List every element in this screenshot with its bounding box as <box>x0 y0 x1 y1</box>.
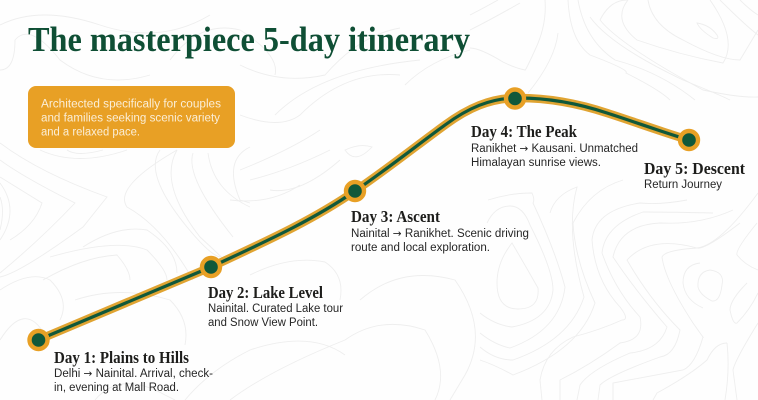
callout: and families seeking scenic variety <box>41 112 220 124</box>
callout: and a relaxed pace. <box>41 126 140 138</box>
text: day 5 <box>644 159 745 191</box>
text: day 1: Delhi → Nainital. Arrival, check- <box>54 368 213 380</box>
callout <box>28 86 235 148</box>
text: day 2: and Snow View Point. <box>208 317 318 329</box>
text: day 2 <box>208 283 343 329</box>
text: day 1 <box>54 348 213 394</box>
text: day 4: Ranikhet → Kausani. Unmatched <box>471 143 638 155</box>
route line <box>38 98 689 340</box>
text: day 4: Day 4: The Peak <box>471 122 578 141</box>
text: day 5: Return Journey <box>644 179 722 191</box>
marker: day 1 <box>30 331 48 349</box>
text: day 2: Day 2: Lake Level <box>208 283 323 302</box>
text: day 3 <box>351 207 529 254</box>
text: day 4: Himalayan sunrise views. <box>471 157 601 169</box>
marker: day 2 <box>202 258 220 276</box>
marker: day 5 <box>680 131 698 149</box>
text: day 3: Nainital → Ranikhet. Scenic driving <box>351 228 529 240</box>
text: day 3: Day 3: Ascent <box>351 207 440 226</box>
text: day 1: in, evening at Mall Road. <box>54 382 179 394</box>
marker: day 3 <box>346 182 364 200</box>
text: day 2: Nainital. Curated Lake tour <box>208 303 343 315</box>
callout: Architected specifically for couples <box>41 98 221 110</box>
text: day 3: route and local exploration. <box>351 242 490 254</box>
text: day 1: Day 1: Plains to Hills <box>54 348 190 367</box>
marker: day 4 <box>506 90 524 108</box>
title: The masterpiece 5-day itinerary <box>28 20 470 59</box>
text: day 4 <box>471 122 638 169</box>
text: day 5: Day 5: Descent <box>644 159 745 178</box>
